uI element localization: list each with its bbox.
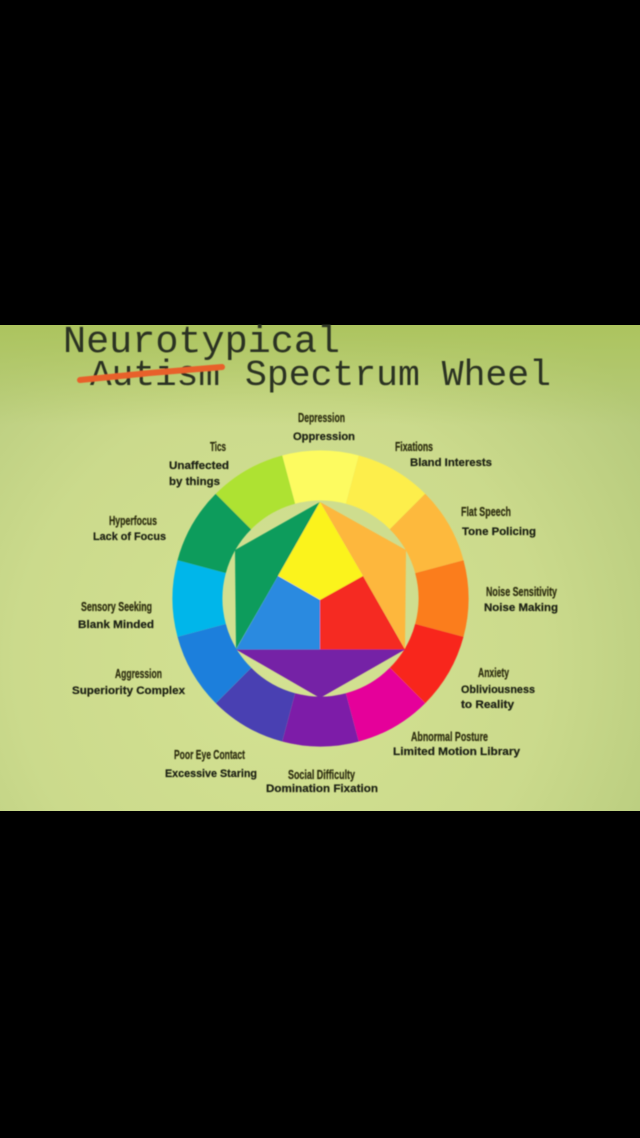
label: Poor Eye Contact: Poor Eye Contact: [174, 747, 245, 762]
title: Neurotypical: [63, 321, 340, 364]
colour wheel: [172, 450, 469, 747]
label: Sensory Seeking: Sensory Seeking: [81, 599, 152, 614]
label: Sensory Seeking: [78, 599, 154, 631]
label: Abnormal Posture: [393, 729, 521, 758]
title: [63, 321, 551, 396]
label: Social Difficulty: Domination Fixation: [266, 783, 378, 795]
panel: green slide: [0, 321, 640, 811]
all wheel labels: [72, 410, 558, 795]
label: Tics: [169, 439, 229, 488]
label: Hyperfocus: [93, 513, 166, 543]
label: Aggression: Aggression: [115, 666, 162, 681]
label: Tics: by things: [169, 476, 220, 488]
label: Aggression: Superiority Complex: [72, 685, 186, 697]
inner triangle and hexagon shapes: [235, 502, 406, 698]
label: Flat Speech: [461, 504, 536, 538]
label: Social Difficulty: [266, 767, 378, 795]
label: Anxiety: [461, 665, 535, 711]
label: Fixations: Bland Interests: [410, 457, 492, 469]
label: Flat Speech: Tone Policing: [462, 526, 536, 538]
label: Depression: Depression: [298, 410, 345, 425]
label: Fixations: Fixations: [395, 439, 433, 454]
label: Anxiety: Obliviousness: [461, 684, 535, 696]
title: Spectrum Wheel: [245, 355, 551, 396]
label: Hyperfocus: Hyperfocus: [109, 513, 157, 528]
label: Hyperfocus: Lack of Focus: [93, 531, 166, 543]
label: Tics: Unaffected: [169, 460, 229, 472]
label: Noise Sensitivity: Noise Sensitivity: [486, 584, 558, 599]
label: Flat Speech: Flat Speech: [461, 504, 511, 519]
label: Abnormal Posture: Limited Motion Library: [393, 746, 521, 758]
label: Anxiety: to Reality: [461, 699, 515, 711]
outer ring of twelve colours: [172, 450, 469, 747]
label: Anxiety: Anxiety: [478, 665, 510, 680]
label: Fixations: [395, 439, 492, 469]
title: Autism: [90, 355, 220, 396]
label: Sensory Seeking: Blank Minded: [78, 619, 154, 631]
label: Depression: [293, 410, 355, 443]
label: Tics: Tics: [210, 439, 226, 454]
label: Poor Eye Contact: Excessive Staring: [165, 768, 257, 780]
label: Noise Sensitivity: [484, 584, 558, 614]
label: Aggression: [72, 666, 186, 697]
label: Social Difficulty: Social Difficulty: [288, 767, 356, 782]
label: Poor Eye Contact: [165, 747, 257, 780]
label: Depression: Oppression: [293, 431, 355, 443]
label: Abnormal Posture: Abnormal Posture: [411, 729, 488, 744]
label: Noise Sensitivity: Noise Making: [484, 602, 558, 614]
